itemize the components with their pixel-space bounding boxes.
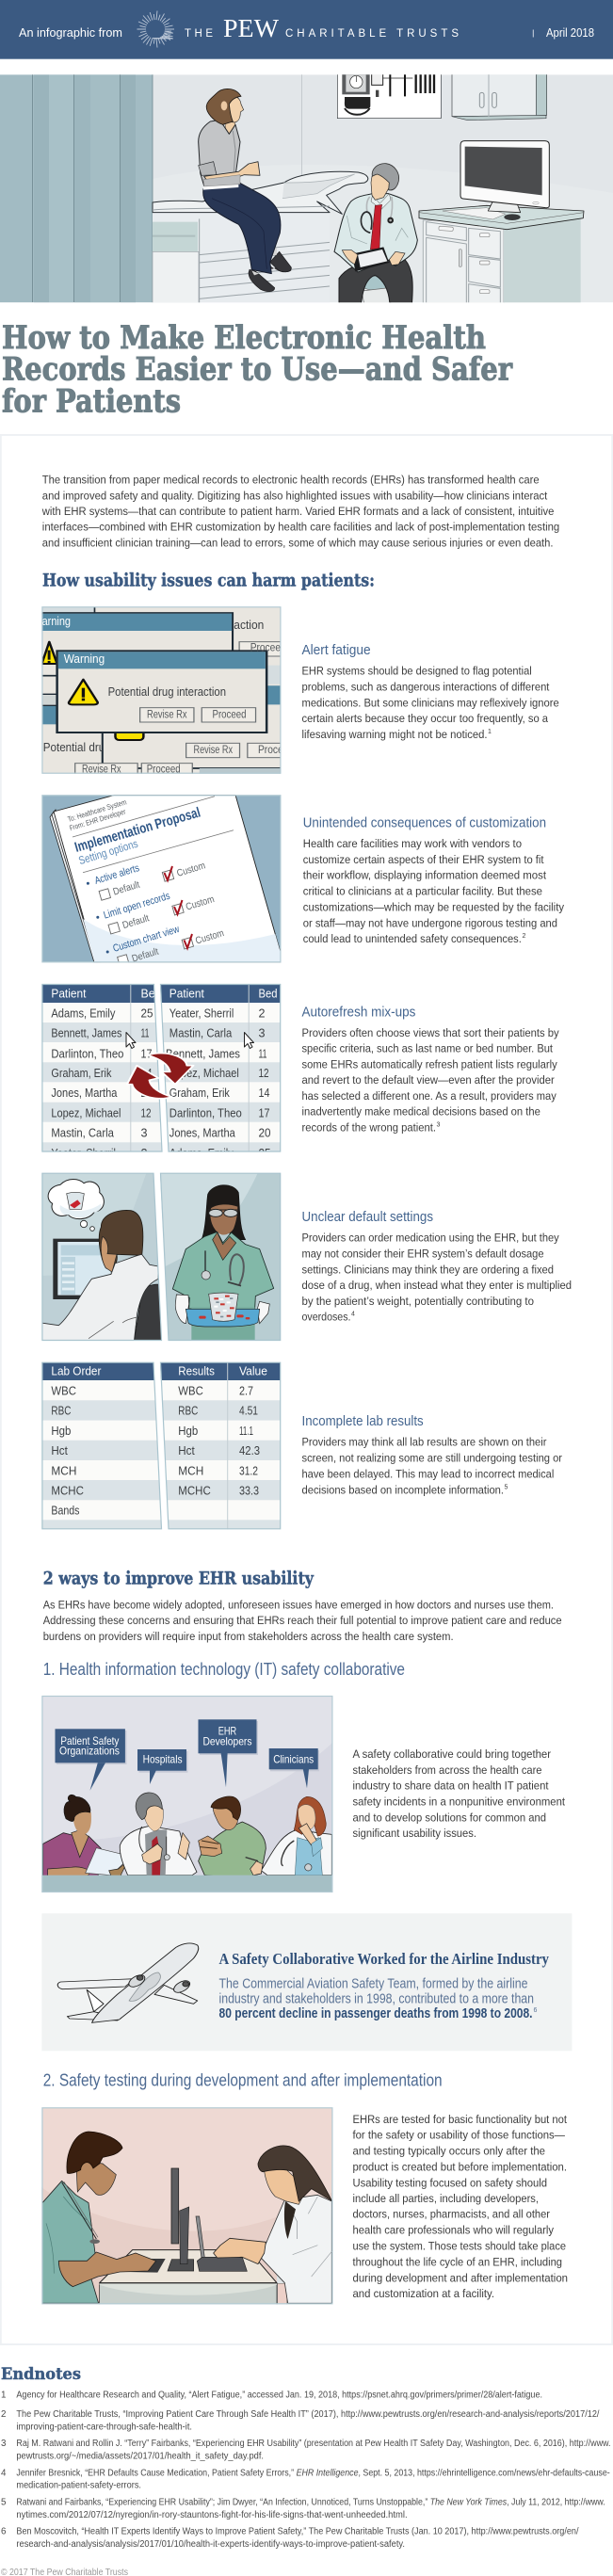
endnotes list: 6 [1,2527,7,2537]
endnotes list: Ben Moscovitch, “Health IT Experts Identify Ways to Improve Patient Safety,” The Pew Charitable Trusts (Jan. 10 2017), http://www.pewtrusts.org/en/ [16,2527,579,2537]
title: for Patients [2,382,181,420]
curtain [0,74,153,302]
callout: airline industry safety collaborative: A Safety Collaborative Worked for the Airline Industry [218,1950,549,1968]
lab order table: WBC [51,1385,76,1398]
illustration: implementation proposal document: Custom [194,927,226,947]
text: safety collaborative description [352,1747,566,1840]
text: incomplete lab results: have been delayed. This may lead to incorrect medical [301,1467,554,1480]
left patient table: 20 [141,1087,153,1100]
text: unclear default settings: settings. Clinicians may think they are ordering a fixed [301,1263,554,1276]
left patient table: Adams, Emily [51,1007,116,1021]
results table: MCH [178,1464,203,1477]
lab order table: MCHC [51,1484,84,1497]
lab order table: Hgb [51,1425,71,1438]
table [41,1876,335,1894]
endnotes list: 4 [1,2468,7,2478]
intro paragraph: and insufficient clinician training—can lead to errors, some of which may cause serious injuries or even death. [42,536,554,549]
paragraph: ways intro: burdens on providers will require input from stakeholders across the health care system. [43,1630,454,1643]
left patient table: Yeater, Sherril [51,1147,116,1160]
text: safety testing description: doctors, nurses, pharmacists, and all other [352,2208,550,2221]
header band: An infographic from [19,26,122,40]
text: autorefresh mix-ups: some EHRs automatically refresh patient lists regularly [301,1057,557,1071]
left patient table: Mastin, Carla [51,1127,114,1140]
illustration: implementation proposal document: Setting options [77,837,139,867]
text: incomplete lab results: Providers may think all lab results are shown on their [301,1436,546,1449]
illustration: stacked warning dialogs: arning [42,614,71,628]
illustration: implementation proposal document: Custom chart view [112,924,181,955]
header band: THE [185,28,213,40]
results table: Hgb [178,1425,198,1438]
endnotes list: 5 [1,2498,7,2508]
right patient table: Jones, Martha [169,1127,235,1140]
illustration: stacked warning dialogs: Proceed [147,765,181,776]
illustration: stacked warning dialogs: Proceed [258,745,294,756]
heading: safety testing: 2. Safety testing during development and after implementation [43,2071,443,2090]
heading: how usability issues can harm patients: How usability issues can harm patients: [42,572,375,591]
results table: MCHC [178,1484,211,1497]
heading: endnotes: Endnotes [1,2365,81,2383]
person: man in green shirt [199,1796,266,1878]
desk [100,2250,287,2305]
right panel: nurse with tray of pills [158,1172,282,1342]
text: unintended consequences of customization: could lead to unintended safety consequences. [303,932,522,945]
text: unintended consequences of customization: customize certain aspects of their EHR system to fit [303,853,544,866]
text: safety collaborative description: significant usability issues. [352,1827,476,1840]
right patient table: 11 [258,1047,267,1060]
speech bubbles: Hospitals [143,1752,183,1765]
callout: airline industry safety collaborative: 80 percent decline in passenger deaths from 1998 to 2008. [218,2005,533,2021]
intro paragraph [41,473,559,549]
endnotes list: improving-patient-care-through-safe-health-it. [16,2422,192,2432]
text: unintended consequences of customization [303,814,565,945]
right patient table: Graham, Erik [169,1087,230,1100]
text: alert fatigue [301,642,559,741]
left patient table [41,984,164,1160]
text: unintended consequences of customization: critical to clinicians at a particular facility. But these [303,884,542,897]
illustration: stacked warning dialogs: Proceed [213,710,247,721]
results table: 31.2 [239,1464,258,1477]
speech bubbles: Developers [203,1734,252,1747]
text: safety testing description: Usability testing focused on safety should [352,2176,547,2189]
left patient table: Lopez, Michael [51,1107,121,1120]
illustration: stacked warning dialogs [40,606,295,776]
header band: PEW [223,13,279,42]
hero illustration: doctor and patient in exam room [0,73,613,305]
icon: Pew sunburst logo [137,11,174,47]
left patient table: Graham, Erik [51,1067,112,1080]
illustration: clinicians testing EHR on computers [41,2107,333,2305]
text: alert fatigue: Alert fatigue [301,642,371,658]
text: unclear default settings: Providers can order medication using the EHR, but they [301,1232,559,1245]
illustration: prescriber thinking small dose, nurse with overdose tray [41,1172,282,1342]
lab order table: Bands [51,1504,79,1517]
results table: RBC [178,1405,198,1418]
illustration: patient lists re-sorted by autorefresh [41,984,281,1160]
callout: airline industry safety collaborative [41,1913,572,2051]
header band: CHARITABLE TRUSTS [285,28,459,40]
text: unclear default settings: overdoses. [301,1311,350,1324]
text: autorefresh mix-ups: and revert to the default view—even after the provider [301,1073,555,1087]
results table: 2.7 [239,1385,253,1398]
text: autorefresh mix-ups: inadvertently make medical decisions based on the [301,1105,540,1119]
icon: airplane [57,1943,199,2022]
endnotes list: research-and-analysis/analysis/2017/01/10/health-it-experts-identify-ways-to-improve-patient-safety. [16,2539,405,2550]
right patient table [158,984,281,1160]
text: incomplete lab results: screen, not realizing some are still undergoing testing or [301,1452,562,1465]
monitor and laptop [125,2168,247,2273]
right patient table: 12 [258,1067,269,1080]
paragraph: ways intro [43,1598,562,1643]
endnotes list: Agency for Healthcare Research and Quality, “Alert Fatigue,” accessed Jan. 19, 2018, https://psnet.ahrq.gov/primers/primer/28/alert-fatigue. [16,2391,542,2401]
illustration: incomplete lab order and results tables [41,1362,281,1530]
text: safety testing description: health care professionals who will regularly [352,2224,555,2237]
text: safety testing description: include all parties, including developers, [352,2192,539,2205]
illustration: implementation proposal document: To: Healthcare System [67,797,128,824]
illustration: stacked warning dialogs: Potential drug [43,740,111,754]
endnotes list: pewtrusts.org/~/media/assets/2017/01/health_it_safety_day.pdf. [16,2451,264,2461]
text: safety collaborative description: stakeholders from across the health care [352,1763,542,1777]
left patient table: Darlinton, Theo [51,1047,123,1060]
lab order table: MCH [51,1464,76,1477]
results table: WBC [178,1385,203,1398]
illustration: stacked warning dialogs: Revise Rx [82,765,121,776]
main content panel [1,435,612,2344]
paragraph: ways intro: As EHRs have become widely adopted, unforeseen issues have emerged in how doctors and nurses use them. [43,1598,554,1611]
wall chart with instruments [337,73,441,119]
clinician in white coat [214,2146,331,2303]
left patient table: Patient [51,987,87,1000]
right patient table: 3 [258,1027,266,1040]
text: unintended consequences of customization: Health care facilities may work with vendors to [303,837,522,850]
illustration: stacked warning dialogs: action [234,618,264,632]
endnotes list: nytimes.com/2012/07/12/nyregion/in-rory-stauntons-fight-for-his-life-signs-that-went-unheeded.html. [16,2510,408,2520]
results table: 33.3 [239,1484,259,1497]
right patient table: Adams, Emily [169,1147,234,1160]
illustration: implementation proposal document: From: EHR Developer [69,807,127,832]
text: incomplete lab results: 5 [505,1484,508,1490]
illustration: stakeholders around table with speech bubbles [41,1696,335,1894]
text: safety testing description: EHRs are tested for basic functionality but not [352,2113,567,2126]
results table: Hct [178,1444,195,1457]
endnotes list: 3 [1,2439,7,2449]
text: alert fatigue: 1 [488,729,492,735]
icon: mouse cursors [126,1032,254,1049]
text: alert fatigue: medications. But some clinicians may reflexively ignore [301,696,559,709]
header band: April 2018 [546,26,594,40]
text: safety collaborative description: A safety collaborative could bring together [352,1747,551,1761]
paragraph: ways intro: Addressing these concerns and ensuring that EHRs reach their full potential to improve patient care and reduce [43,1614,562,1627]
thought bubble [48,1179,104,1231]
text: alert fatigue: certain alerts because they occur too frequently, so a [301,712,548,725]
text: safety testing description: use the system. Those tests should take place [352,2240,566,2253]
results table: 42.3 [239,1444,260,1457]
illustration: implementation proposal document: Implementation Proposal [73,804,202,856]
text: safety testing description: throughout the life cycle of an EHR, including [352,2255,562,2268]
right patient table: Patient [169,987,204,1000]
callout: airline industry safety collaborative: The Commercial Aviation Safety Team, formed by the airline [218,1976,527,1992]
icon: red refresh arrows [127,1054,194,1099]
illustration: implementation proposal document: Custom [175,860,207,879]
right patient table: 2 [258,1007,266,1021]
left patient table: 12 [141,1107,152,1120]
illustration: stacked warning dialogs: Revise Rx [147,710,187,721]
text: autorefresh mix-ups: has selected a different one. As a result, providers may [301,1089,557,1103]
text: safety testing description: during development and after implementation [352,2271,568,2284]
intro paragraph: interfaces—combined with EHR customization by health care facilities and lack of post-implementation testing [42,521,559,534]
text: safety collaborative description: industry to share data on health IT patient [352,1779,549,1793]
results table: Value [239,1365,267,1378]
text: autorefresh mix-ups: specific criteria, such as last name or bed number. But [301,1042,553,1055]
counter [419,205,584,305]
text: unclear default settings: dose of a drug, when instead what they enter is multiplied [301,1279,572,1292]
text: unintended consequences of customization: or staff—may not have undergone rigorous testing and [303,916,557,929]
right patient table: 25 [258,1147,271,1160]
text: unclear default settings: by the patient’s weight, potentially contributing to [301,1295,534,1308]
right patient table: 17 [258,1107,270,1120]
right patient table: Lopez, Michael [169,1067,239,1080]
lab order table: RBC [51,1405,71,1418]
right patient table: Yeater, Sherril [169,1007,234,1021]
text: alert fatigue: EHR systems should be designed to flag potential [301,665,532,678]
left patient table: 14 [141,1067,153,1080]
text: unclear default settings [301,1209,572,1324]
text: autorefresh mix-ups [301,1004,559,1135]
wall chart, cabinets, monitor and doctor [334,73,584,305]
text: safety collaborative description: safety incidents in a nonpunitive environment [352,1795,566,1808]
right patient table: Darlinton, Theo [169,1107,242,1120]
left patient table: 25 [141,1007,153,1021]
text: unintended consequences of customization: customizations—which may be requested by the facility [303,900,565,913]
illustration: implementation proposal document: Default [121,912,151,931]
right patient table: 20 [258,1127,271,1140]
illustration: implementation proposal document: Default [131,946,160,965]
stool [362,276,391,303]
speech bubbles [55,1719,319,1791]
right patient table: Bed [258,987,278,1000]
speech bubbles: Patient Safety [60,1734,119,1747]
text: unclear default settings: 4 [351,1312,355,1318]
text: unintended consequences of customization: their workflow, displaying information deemed most [303,869,547,882]
speech bubbles: EHR [218,1725,236,1738]
wall cabinet [452,73,547,121]
left patient table: 11 [141,1027,150,1040]
lab order table: Lab Order [51,1365,101,1378]
header band [0,0,613,59]
lab order table: Hct [51,1444,68,1457]
endnotes list: medication-patient-safety-errors. [16,2481,141,2491]
left patient table: Bed [141,987,162,1000]
text: autorefresh mix-ups: Providers often choose views that sort their patients by [301,1026,559,1039]
illustration: implementation proposal document: Limit open records [103,891,171,922]
text: autorefresh mix-ups: records of the wrong patient. [301,1121,436,1135]
intro paragraph: with EHR systems—that can contribute to patient harm. Varied EHR formats and a lack of consistent, intuitive [41,505,554,518]
text: safety testing description: and customization at a facility. [352,2287,494,2300]
text: unintended consequences of customization: Unintended consequences of customization [303,814,546,830]
illustration: implementation proposal document: Default [112,879,141,898]
text: unintended consequences of customization: 2 [522,933,525,940]
text: unclear default settings: Unclear default settings [301,1209,433,1225]
illustration: stacked warning dialogs: Warning [64,652,105,666]
illustration: stacked warning dialogs: Revise Rx [194,745,233,756]
exam table and patient [153,89,368,305]
patient [199,89,291,292]
speech bubbles: Organizations [59,1745,120,1758]
results table [158,1362,281,1530]
text: incomplete lab results: Incomplete lab results [301,1413,424,1429]
left patient table: 2 [141,1147,148,1160]
endnotes list: 2 [1,2409,6,2420]
left patient table: Jones, Martha [51,1087,117,1100]
doctor [334,164,417,305]
intro paragraph: The transition from paper medical records to electronic health records (EHRs) has transformed health care [42,473,540,486]
left panel: prescriber at computer [41,1172,164,1342]
results table: Results [178,1365,215,1378]
illustration: stacked warning dialogs: Potential drug interaction [108,684,226,699]
right patient table: 14 [258,1087,270,1100]
text: autorefresh mix-ups: Autorefresh mix-ups [301,1004,415,1020]
text: safety testing description: product is created but before implementation. [352,2160,567,2173]
lab order table [41,1362,164,1530]
text: alert fatigue: lifesaving warning might not be noticed. [301,728,488,741]
text: unclear default settings: may not consider their EHR system’s default dosage [301,1247,544,1260]
text: safety testing description: for the safety or usability of those functions— [352,2129,566,2142]
title: Records Easier to Use—and Safer [2,350,513,388]
endnotes list: 1 [1,2391,6,2401]
text: autorefresh mix-ups: 3 [437,1122,441,1129]
left patient table: Bennett, James [51,1027,121,1040]
heading: health IT safety collaborative: 1. Health information technology (IT) safety collaborative [43,1660,405,1679]
person: male doctor [120,1793,197,1876]
text: alert fatigue: problems, such as dangerous interactions of different [301,680,550,693]
right patient table: Mastin, Carla [169,1027,232,1040]
title: How to Make Electronic Health [2,319,486,357]
right patient table: Bennett, James [166,1047,240,1060]
left patient table: 17 [141,1047,153,1060]
illustration: implementation proposal document [41,795,282,970]
text: incomplete lab results [301,1413,562,1496]
person: woman with paper [43,1795,124,1876]
person: woman clinician [246,1796,331,1876]
results table: 11.1 [239,1425,253,1438]
endnotes list [1,2391,610,2550]
intro paragraph: and improved safety and quality. Digitizing has also highlighted issues with usability—how clinicians interact [42,489,548,502]
illustration: implementation proposal document: Active alerts [93,862,141,887]
text: safety testing description [352,2113,568,2300]
text: incomplete lab results: decisions based on incomplete information. [301,1483,504,1496]
left patient table: 3 [141,1127,148,1140]
endnotes list: Ratwani and Fairbanks, “Experiencing EHR Usability”; Jim Dwyer, “An Infection, Unnoticed, Turns Unstoppable,” The New York Times, July 11, 2012, http://www. [16,2498,605,2508]
illustration: stacked warning dialogs: Proceed [250,643,286,654]
illustration: implementation proposal document: Custom [185,894,216,913]
text: safety testing description: and testing typically occurs only after the [352,2145,545,2158]
clinician in scrubs [42,2132,156,2303]
heading: 2 ways to improve EHR usability: 2 ways to improve EHR usability [43,1570,315,1589]
callout: airline industry safety collaborative: 6 [533,2007,537,2014]
speech bubbles: Clinicians [273,1752,314,1765]
callout: airline industry safety collaborative: industry and stakeholders in 1998, contributed to a more than [218,1990,534,2006]
title [2,319,513,420]
text: safety collaborative description: and to develop solutions for common and [352,1811,546,1824]
results table: 4.51 [239,1405,258,1418]
computer monitor [443,141,549,220]
